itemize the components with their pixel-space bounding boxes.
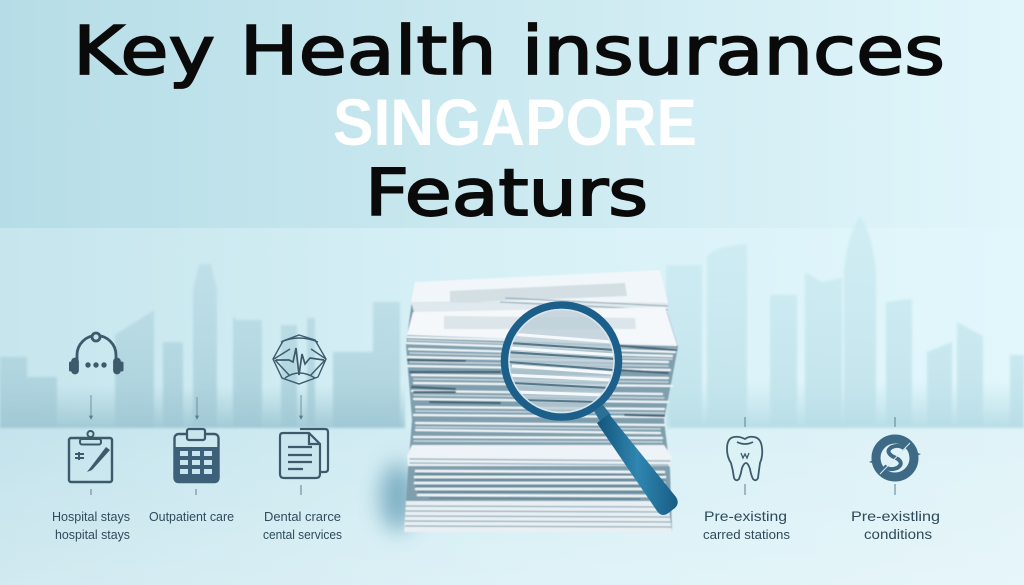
feature: pre-existing care [703,417,790,542]
label: Pre-existing [704,508,787,524]
icon: tooth [727,437,762,480]
icon: headset [70,333,123,373]
icon: calendar [174,429,219,483]
arrow [90,489,92,495]
arrow [195,489,197,495]
label: Pre-existling [851,508,940,524]
icon: documents [280,429,328,478]
feature: hospital stays [52,333,130,542]
stack shadow [380,463,416,531]
title [73,12,945,231]
magnifying glass [504,305,678,515]
connector [744,417,746,427]
arrow [300,485,302,495]
title line 3: Featurs [365,157,648,231]
icon: hexagonal heartbeat globe [273,335,326,384]
lens [504,305,618,417]
skyline: left city silhouette [0,264,405,428]
top sheet [411,270,668,303]
background: skyline sky band [0,228,1024,428]
arrow [196,397,198,419]
handle [597,414,678,515]
handle collar [594,405,611,423]
arrow [300,395,302,419]
label: conditions [864,527,932,542]
paper stack [404,270,678,532]
label: Dental crarce [264,510,341,524]
connector [894,417,896,427]
second sheet [407,307,677,345]
title line 2: SINGAPORE: SINGAPORE [333,85,697,159]
label: hospital stays [55,528,130,542]
skyline: right city silhouette [666,216,1024,428]
label: Outpatient care [149,510,234,524]
label: carred stations [703,528,790,542]
feature: outpatient care [149,397,234,524]
icon: circular arrows with dollar [869,439,921,477]
title line 1: Key Health insurances [73,12,945,90]
icon: clipboard with pencil [69,431,112,482]
feature: dental care [263,335,342,542]
connector [744,484,746,495]
label: Hospital stays [52,510,130,524]
arrow [90,395,92,419]
lower sheet: large band [407,445,672,466]
bottom sheet band [404,501,672,532]
label: cental services [263,528,342,542]
background: floor [0,428,1024,585]
mid sheet bands [407,337,676,442]
feature: pre-existing conditions [851,417,940,542]
background: upper title band [0,0,1024,228]
ring [504,305,618,417]
connector [894,484,896,495]
